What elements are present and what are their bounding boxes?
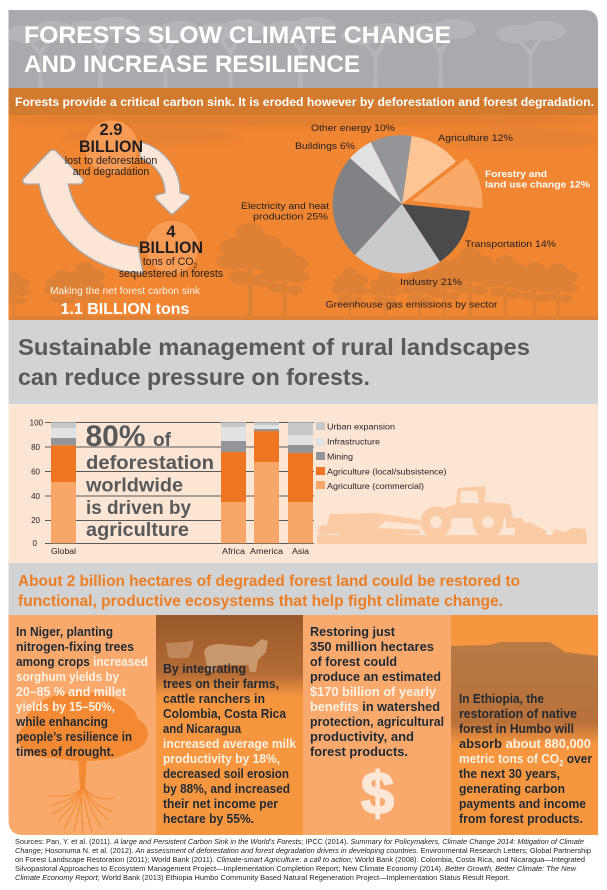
bar: America: [254, 422, 279, 543]
text: 4 billion sequestered: BILLION: [139, 238, 203, 257]
sources: Change; Hosonuma N. et al. (2012). An assessment of deforestation and forest degradation drivers in developing countries. Environmental Research Letters; Global Partnership: [15, 846, 591, 855]
text block: Colombia: By integrating: [163, 662, 246, 676]
text block: restoring: 350 million hectares: [310, 640, 434, 654]
text block: restoring: forest products.: [310, 745, 408, 759]
text block: Niger: among crops increased: [16, 655, 148, 669]
text block: Ethiopia: absorb about 880,000: [459, 737, 591, 751]
text: net carbon sink: Making the net forest carbon sink: [50, 286, 201, 297]
pie labels: Transportation 14%: [465, 239, 557, 250]
sources: on Forest Landscape Restoration (2011); World Bank (2011). Climate-smart Agriculture: a call to action; World Bank (2008). Colombia, Costa Rica, and Nicaragua—Integrated: [15, 855, 585, 864]
text block: Colombia: productivity by 18%,: [163, 752, 280, 766]
axis labels: 80: [31, 443, 41, 452]
callout: 80 percent: worldwide: [85, 476, 183, 496]
text: 2.9 billion lost: and degradation: [73, 166, 149, 178]
text block: Colombia: [163, 662, 297, 826]
panel: header background: [8, 10, 598, 88]
text: 2.9 billion lost: 2.9: [100, 121, 122, 139]
heading: restoration: functional, productive ecosystems that help fight climate change.: [18, 593, 503, 610]
axis labels: 60: [31, 468, 41, 476]
callout: 80 percent: is driven by: [86, 498, 191, 519]
panel: sustainable management heading band: [8, 320, 598, 404]
arrow: loss arrow: [140, 142, 190, 214]
text block: restoring: Restoring just: [310, 625, 396, 639]
icon: cattle photo: [166, 639, 268, 672]
legend: Agriculture (local/subsistence): [327, 466, 447, 476]
panel: carbon sink strip: [8, 88, 598, 115]
heading: sustainable management: Sustainable management of rural landscapes: [18, 334, 530, 360]
pie labels: Electricity and heat: [241, 201, 329, 212]
icon: dollar sign: $: [361, 760, 394, 827]
heading: sustainable management: can reduce pressure on forests.: [18, 364, 370, 390]
title: AND INCREASE RESILIENCE: [24, 51, 360, 78]
sources: Silvopastoral Approaches to Ecosystem Management Project—Implementation Completion Report; New Climate Economy (2014). Better Growth, Better Climate: The New: [15, 864, 577, 873]
text block: Colombia: decreased soil erosion: [163, 767, 289, 781]
text block: Ethiopia: generating carbon: [459, 782, 565, 796]
sources: [15, 837, 591, 882]
text block: Colombia: by 88%, and increased: [163, 782, 290, 796]
text block: Colombia: increased average milk: [163, 737, 297, 751]
panel: restoring background: [303, 615, 451, 835]
bar labels: Asia: [292, 547, 310, 556]
text block: Ethiopia: the next 30 years,: [459, 767, 560, 781]
pie chart: greenhouse gas emissions by sector: [333, 135, 483, 273]
heading: restoration: About 2 billion hectares of degraded forest land could be restored to: [18, 573, 520, 590]
axis labels: [30, 418, 44, 548]
text: 2.9 billion lost: [65, 121, 157, 178]
text: 2.9 billion lost: BILLION: [79, 137, 143, 156]
bar labels: Global: [51, 547, 76, 556]
bar: Africa: [221, 422, 246, 543]
circle: 4 billion: [145, 220, 199, 274]
pie labels: Agriculture 12%: [438, 133, 514, 144]
panel: Ethiopia background: [451, 615, 598, 835]
text block: restoring: [310, 625, 444, 759]
pie labels: Industry 21%: [400, 277, 463, 288]
legend: Agriculture (commercial): [327, 481, 424, 491]
text: net carbon sink: [50, 286, 201, 318]
text block: Niger: yields by 15–50%,: [16, 700, 115, 714]
heading: sustainable management: [18, 334, 530, 390]
text block: Ethiopia: [459, 692, 592, 826]
text: 4 billion sequestered: tons of CO: [143, 256, 194, 268]
legend: Urban expansion: [327, 422, 395, 432]
heading: restoration: [18, 573, 520, 610]
panel: Colombia background: [156, 615, 303, 835]
bar: Asia: [288, 422, 313, 543]
callout: 80 percent: deforestation: [86, 453, 214, 474]
text block: Niger: sorghum yields by: [16, 670, 119, 684]
text block: restoring: protection, agricultural: [310, 715, 444, 729]
text block: Niger: 20–85 % and millet: [16, 685, 127, 699]
legend: Infrastructure: [327, 436, 380, 446]
legend: [316, 422, 447, 491]
text block: Ethiopia: from forest products.: [459, 812, 583, 826]
pie labels: land use change 12%: [485, 180, 590, 190]
text block: Colombia: hectare by 55%.: [163, 812, 254, 826]
bar labels: America: [250, 547, 284, 556]
pie labels: Other energy 10%: [311, 123, 395, 134]
text block: Ethiopia: In Ethiopia, the: [459, 692, 544, 706]
text block: Niger: while enhancing: [15, 715, 108, 729]
text block: Niger: people’s resilience in: [16, 730, 132, 744]
text block: Colombia: and Nicaragua: [163, 722, 242, 736]
text block: Niger: [15, 625, 148, 759]
axis labels: 20: [31, 516, 41, 525]
sources: Climate Economy Report; World Bank (2013) Ethiopia Humbo Community Based Natural Regeneration Project—Implementation Status Result Report.: [15, 873, 510, 882]
text block: Niger: nitrogen-fixing trees: [16, 640, 134, 654]
text block: Niger: times of drought.: [16, 745, 114, 759]
text block: Colombia: Colombia, Costa Rica: [163, 707, 287, 721]
text block: Niger: In Niger, planting: [16, 625, 113, 639]
text block: Ethiopia: metric tons of CO: [459, 752, 559, 766]
bar labels: [51, 547, 310, 556]
title: [24, 22, 451, 78]
text block: restoring: $170 billion of yearly: [310, 685, 436, 699]
text block: Colombia: their net income per: [163, 797, 278, 811]
legend: Mining: [327, 452, 353, 462]
axis labels: 40: [31, 492, 41, 501]
icon: tractor with implement: [317, 486, 587, 544]
subtitle strip text: Forests provide a critical carbon sink. It is eroded however by deforestation and forest degradation.: [15, 95, 594, 109]
pie labels: Forestry and: [485, 169, 547, 180]
text: 4 billion sequestered: 2: [194, 262, 198, 270]
stacked bar chart: drivers of deforestation: [30, 418, 314, 556]
callout: 80 percent: 80%: [86, 420, 146, 453]
text: 4 billion sequestered: 4: [166, 223, 176, 241]
mountain photo: [451, 642, 598, 745]
title: FORESTS SLOW CLIMATE CHANGE: [24, 22, 451, 49]
text block: Ethiopia: 2: [559, 759, 564, 768]
text block: restoring: of forest could: [310, 655, 397, 669]
text block: Ethiopia: forest in Humbo will: [459, 722, 574, 736]
pie labels: [241, 123, 590, 310]
text block: restoring: benefits in watershed: [310, 700, 440, 714]
axis labels: 0: [33, 539, 38, 548]
panel: restoration heading band: [8, 563, 598, 615]
text block: restoring: produce an estimated: [310, 670, 441, 684]
bar: Global: [51, 422, 76, 543]
implement frame: [322, 513, 421, 534]
text: 4 billion sequestered: [119, 223, 223, 280]
panel: orange carbon section background: [8, 115, 598, 320]
callout: 80 percent: of: [153, 430, 172, 451]
axis labels: 100: [30, 418, 44, 428]
icon: tree with roots: [18, 692, 148, 833]
pie labels: Greenhouse gas emissions by sector: [326, 300, 498, 310]
pie labels: Buildings 6%: [295, 141, 356, 152]
text block: Ethiopia: over: [563, 752, 592, 766]
text block: Colombia: trees on their farms,: [163, 677, 279, 691]
background trees: [0, 223, 598, 323]
arrow: sequestration arrow: [23, 150, 143, 273]
bar labels: Africa: [222, 547, 246, 556]
circle: 2.9 billion: [84, 120, 138, 174]
panel: deforestation chart background: [8, 404, 598, 563]
carbon cycle diagram: [23, 120, 223, 318]
text block: Ethiopia: restoration of native: [459, 707, 577, 721]
callout: 80 percent: agriculture: [86, 520, 189, 541]
callout: 80 percent: [85, 420, 214, 541]
text: 4 billion sequestered: sequestered in forests: [119, 268, 223, 280]
text block: Colombia: cattle ranchers in: [163, 692, 265, 706]
pie labels: production 25%: [253, 212, 329, 222]
sources: Sources: Pan, Y. et al. (2011). A large and Persistent Carbon Sink in the World’s Forests; IPCC (2014). Summary for Policymakers, Climate Change 2014: Mitigation of Climate: [15, 837, 584, 846]
text block: restoring: productivity, and: [310, 730, 414, 744]
panel: Niger background: [8, 615, 156, 835]
text block: Ethiopia: payments and income: [459, 797, 586, 811]
text: net carbon sink: 1.1 BILLION tons: [61, 301, 190, 318]
text: 2.9 billion lost: lost to deforestation: [65, 155, 157, 167]
